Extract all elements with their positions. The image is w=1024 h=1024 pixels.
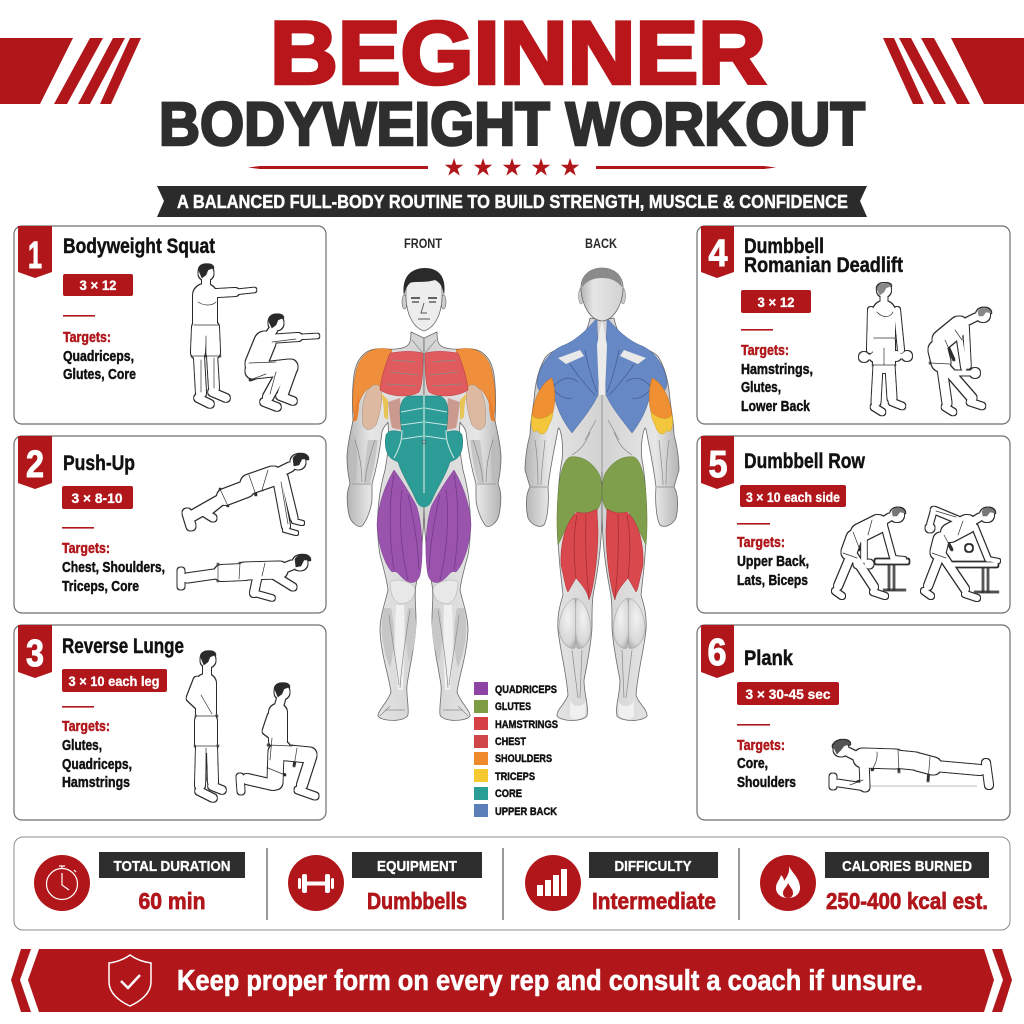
icon: shield bbox=[109, 955, 151, 1006]
panel 4: romanian deadlift: Lower Back bbox=[741, 399, 811, 415]
star divider: ★ bbox=[474, 156, 493, 180]
stat: total duration bbox=[34, 852, 245, 914]
panel 5: dumbbell row: Dumbbell Row bbox=[744, 450, 866, 473]
tagline ribbon bbox=[157, 186, 867, 217]
panel 4: romanian deadlift bbox=[697, 226, 1010, 424]
panel 2: push-up: Chest, Shoulders, bbox=[62, 560, 165, 576]
panel 6: plank: Core, bbox=[737, 756, 768, 772]
panel 4: romanian deadlift: Hamstrings, bbox=[741, 362, 813, 378]
stat: equipment bbox=[288, 852, 482, 914]
bottom banner bbox=[11, 949, 1012, 1012]
anatomy: front figure bbox=[347, 268, 501, 720]
legend: QUADRICEPS bbox=[495, 684, 557, 696]
legend: CHEST bbox=[495, 736, 526, 748]
star divider: ★ bbox=[532, 156, 551, 180]
panel 1: bodyweight squat bbox=[14, 226, 326, 424]
panel 3: reverse lunge: 3 bbox=[26, 633, 44, 675]
panel 1: bodyweight squat: Targets: bbox=[63, 330, 111, 346]
panel 5: dumbbell row: Targets: bbox=[737, 535, 785, 551]
panel 5: dumbbell row bbox=[697, 436, 1010, 613]
panel 3: reverse lunge: Targets: bbox=[62, 719, 110, 735]
star divider bbox=[248, 156, 776, 180]
star divider: ★ bbox=[445, 156, 464, 180]
panel 3: reverse lunge: 3 × 10 each leg bbox=[68, 673, 160, 689]
legend bbox=[474, 682, 558, 818]
title: BEGINNER bbox=[270, 2, 766, 102]
anatomy: back figure bbox=[525, 268, 679, 720]
panel 3: reverse lunge: Reverse Lunge bbox=[62, 635, 184, 658]
panel 6: plank: Targets: bbox=[737, 738, 785, 754]
panel 4: romanian deadlift: Glutes, bbox=[741, 380, 781, 396]
panel 4: romanian deadlift: Dumbbell bbox=[744, 235, 824, 258]
panel 1: bodyweight squat: Quadriceps, bbox=[63, 349, 134, 365]
panel 3: reverse lunge: Hamstrings bbox=[62, 775, 130, 791]
stat: calories bbox=[760, 852, 989, 914]
panel 1: bodyweight squat: Bodyweight Squat bbox=[63, 235, 215, 258]
panel 2: push-up: Push-Up bbox=[63, 452, 135, 475]
star divider: ★ bbox=[561, 156, 580, 180]
panel 6: plank bbox=[697, 625, 1010, 820]
panel 2: push-up: 2 bbox=[26, 444, 44, 486]
panel 2: push-up bbox=[14, 436, 326, 613]
body diagram labels: FRONT bbox=[404, 236, 443, 251]
stats bar bbox=[14, 837, 1010, 930]
stat: calories: 250-400 kcal est. bbox=[826, 888, 988, 914]
panel 6: plank: 3 × 30-45 sec bbox=[746, 686, 831, 702]
stat: difficulty: DIFFICULTY bbox=[614, 859, 692, 875]
stat: difficulty: Intermediate bbox=[592, 888, 716, 914]
panel 1: bodyweight squat: 1 bbox=[28, 235, 42, 277]
star divider: ★ bbox=[503, 156, 522, 180]
panel 4: romanian deadlift: 3 × 12 bbox=[758, 294, 795, 310]
panel 4: romanian deadlift: 4 bbox=[708, 233, 728, 275]
tagline ribbon: A BALANCED FULL-BODY ROUTINE TO BUILD STRENGTH, MUSCLE & CONFIDENCE bbox=[177, 191, 848, 212]
subtitle heading: BODYWEIGHT WORKOUT bbox=[159, 90, 865, 158]
panel 5: dumbbell row: 3 × 10 each side bbox=[746, 489, 840, 505]
bottom banner: Keep proper form on every rep and consult a coach if unsure. bbox=[177, 965, 923, 997]
panel 3: reverse lunge: Quadriceps, bbox=[62, 757, 132, 773]
panel 3: reverse lunge bbox=[14, 625, 326, 820]
legend: SHOULDERS bbox=[495, 753, 552, 765]
panel 6: plank: Plank bbox=[744, 647, 793, 670]
header stripes right bbox=[883, 38, 1024, 104]
legend: UPPER BACK bbox=[495, 806, 557, 818]
body diagram labels: BACK bbox=[585, 236, 617, 251]
panel 6: plank: Shoulders bbox=[737, 775, 796, 791]
panel 5: dumbbell row: Lats, Biceps bbox=[737, 573, 808, 589]
body diagram labels bbox=[404, 236, 617, 251]
stat: calories: CALORIES BURNED bbox=[842, 859, 972, 875]
panel 5: dumbbell row: Upper Back, bbox=[737, 554, 809, 570]
panel 6: plank: 6 bbox=[708, 632, 726, 674]
panel 4: romanian deadlift: Romanian Deadlift bbox=[744, 254, 903, 277]
panel 5: dumbbell row: 5 bbox=[708, 444, 728, 486]
stat: equipment: EQUIPMENT bbox=[377, 859, 457, 875]
panel 4: romanian deadlift: Targets: bbox=[741, 343, 789, 359]
panel 3: reverse lunge: Glutes, bbox=[62, 738, 102, 754]
legend: TRICEPS bbox=[495, 771, 535, 783]
panel 2: push-up: Triceps, Core bbox=[62, 579, 139, 595]
stat: total duration: 60 min bbox=[138, 888, 206, 914]
legend: CORE bbox=[495, 788, 522, 800]
stat: equipment: Dumbbells bbox=[367, 888, 467, 914]
stat: difficulty bbox=[525, 852, 718, 914]
legend: GLUTES bbox=[495, 701, 531, 713]
header stripes left bbox=[0, 38, 141, 104]
legend: HAMSTRINGS bbox=[495, 719, 558, 731]
stat: total duration: TOTAL DURATION bbox=[114, 859, 230, 875]
panel 2: push-up: Targets: bbox=[62, 541, 110, 557]
panel 1: bodyweight squat: 3 × 12 bbox=[80, 277, 117, 293]
panel 2: push-up: 3 × 8-10 bbox=[72, 490, 123, 506]
panel 1: bodyweight squat: Glutes, Core bbox=[63, 367, 136, 383]
